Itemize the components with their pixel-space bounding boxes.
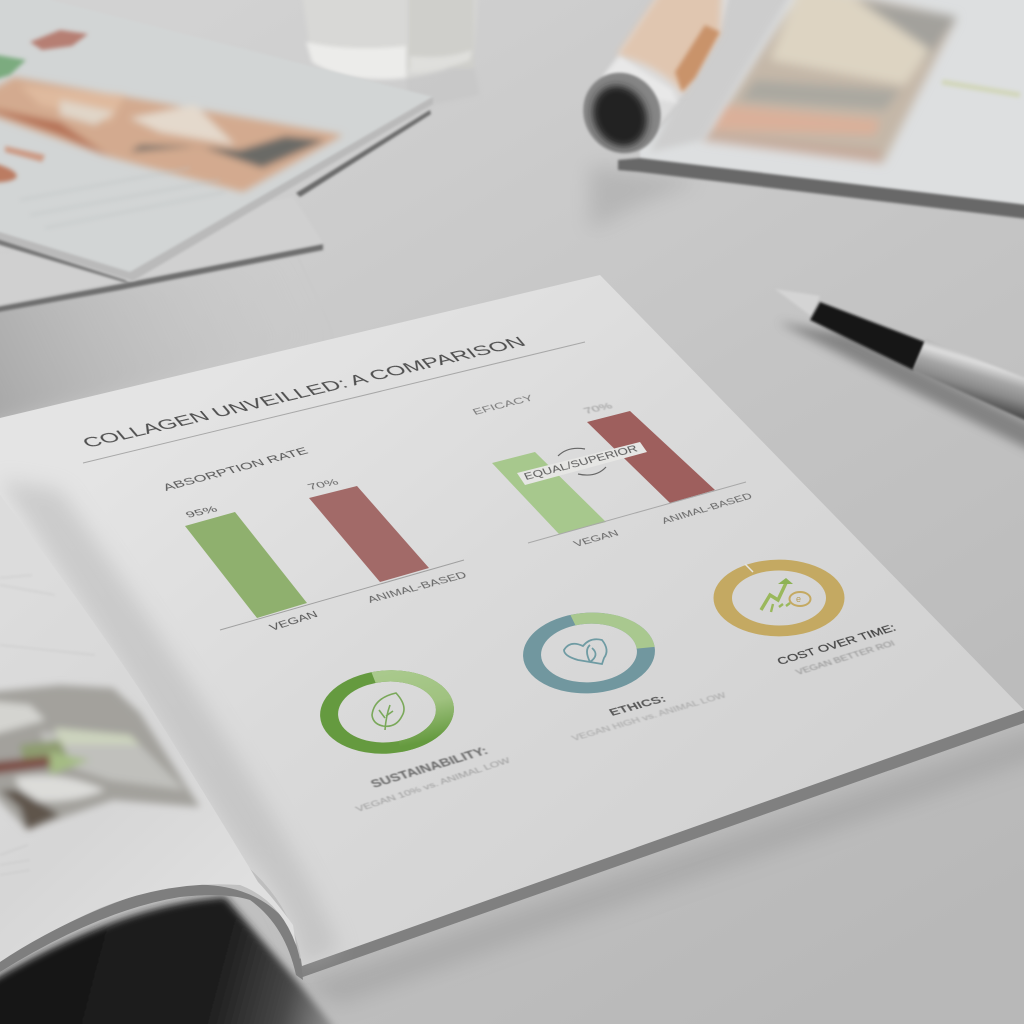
main page bbox=[0, 275, 1024, 966]
pen grip bbox=[810, 302, 925, 370]
bar: animal-based bbox=[587, 411, 715, 503]
label: SUSTAINABILITY: bbox=[368, 744, 490, 790]
pen bbox=[775, 289, 1024, 465]
left page bbox=[0, 495, 296, 962]
pen shadow bbox=[778, 322, 1024, 465]
sub label: VEGAN BETTER ROI bbox=[794, 640, 897, 677]
sub label: VEGAN HIGH vs. ANIMAL LOW bbox=[570, 691, 728, 743]
back magazine, top left bbox=[0, 197, 323, 317]
magazine page bbox=[0, 0, 433, 276]
roll printed area bbox=[617, 0, 722, 93]
value 70%: 70% bbox=[582, 401, 615, 416]
magazine page bbox=[640, 0, 1024, 210]
curved page block edge bbox=[0, 884, 303, 980]
front magazine, top left bbox=[0, 0, 433, 284]
label animal-based: ANIMAL-BASED bbox=[660, 492, 754, 526]
icon: rising arrow with coin bbox=[761, 578, 810, 612]
left page photo bbox=[0, 685, 200, 830]
chart: efficacy bbox=[471, 394, 754, 549]
magazine text block bbox=[20, 168, 225, 228]
axis bbox=[528, 482, 746, 543]
magazine photo bbox=[703, 0, 957, 163]
icon: leaf bbox=[372, 693, 404, 730]
left page text hints bbox=[0, 575, 95, 875]
pen barrel bbox=[913, 339, 1024, 436]
donut ring bbox=[327, 672, 447, 752]
label: COST OVER TIME: bbox=[774, 622, 898, 667]
bar: animal-based 70% bbox=[309, 486, 429, 582]
arrow: upper arc bbox=[558, 448, 585, 456]
pen tip bbox=[775, 289, 820, 316]
glass of water bbox=[300, 0, 480, 110]
magazine, top right bbox=[590, 0, 1024, 230]
spine shading bbox=[0, 480, 340, 966]
green accent line bbox=[942, 82, 1020, 95]
rolled magazine page bbox=[569, 0, 732, 168]
title rule bbox=[83, 342, 585, 463]
magazine small accents bbox=[0, 30, 88, 182]
dark hollow under curled page bbox=[0, 897, 360, 1024]
label vegan: VEGAN bbox=[572, 529, 621, 549]
magazine edges bbox=[0, 97, 433, 281]
roll opening bbox=[569, 58, 675, 168]
icon: heart with leaf bbox=[564, 639, 607, 664]
magazine edge bbox=[618, 158, 1024, 223]
roll white band bbox=[603, 57, 677, 103]
chart heading: ABSORPTION RATE bbox=[160, 445, 310, 493]
booklet page edge bbox=[296, 710, 1024, 978]
donut ring bbox=[530, 615, 648, 691]
label vegan: VEGAN bbox=[267, 609, 320, 633]
axis bbox=[220, 560, 464, 630]
metric: sustainability bbox=[327, 672, 512, 814]
icon: rising arrow with coin: e bbox=[796, 594, 801, 604]
metric: ethics bbox=[530, 615, 728, 743]
sub label: VEGAN 10% vs. ANIMAL LOW bbox=[354, 757, 512, 814]
bar: vegan bbox=[492, 452, 606, 534]
metric: cost over time bbox=[723, 564, 898, 677]
title: COLLAGEN UNVEILLED: A COMPARISON bbox=[78, 334, 530, 451]
bar: vegan 95% bbox=[185, 512, 307, 618]
booklet shadow bbox=[300, 722, 1024, 1005]
donut ring bbox=[723, 564, 835, 631]
value 95%: 95% bbox=[184, 505, 220, 520]
label animal-based: ANIMAL-BASED bbox=[365, 569, 469, 605]
callout: equal or superior: EQUAL/SUPERIOR bbox=[522, 442, 639, 482]
open booklet bbox=[0, 275, 1024, 1024]
chart: absorption rate bbox=[160, 445, 469, 633]
label: ETHICS: bbox=[606, 693, 668, 718]
chart heading: EFICACY bbox=[471, 394, 536, 417]
page spine strip bbox=[650, 0, 800, 152]
magazine photo bbox=[0, 77, 343, 192]
arrow: lower arc bbox=[578, 467, 606, 475]
value 70%: 70% bbox=[306, 478, 341, 492]
magazine shadow bbox=[590, 165, 700, 230]
roll outer body bbox=[603, 0, 732, 150]
